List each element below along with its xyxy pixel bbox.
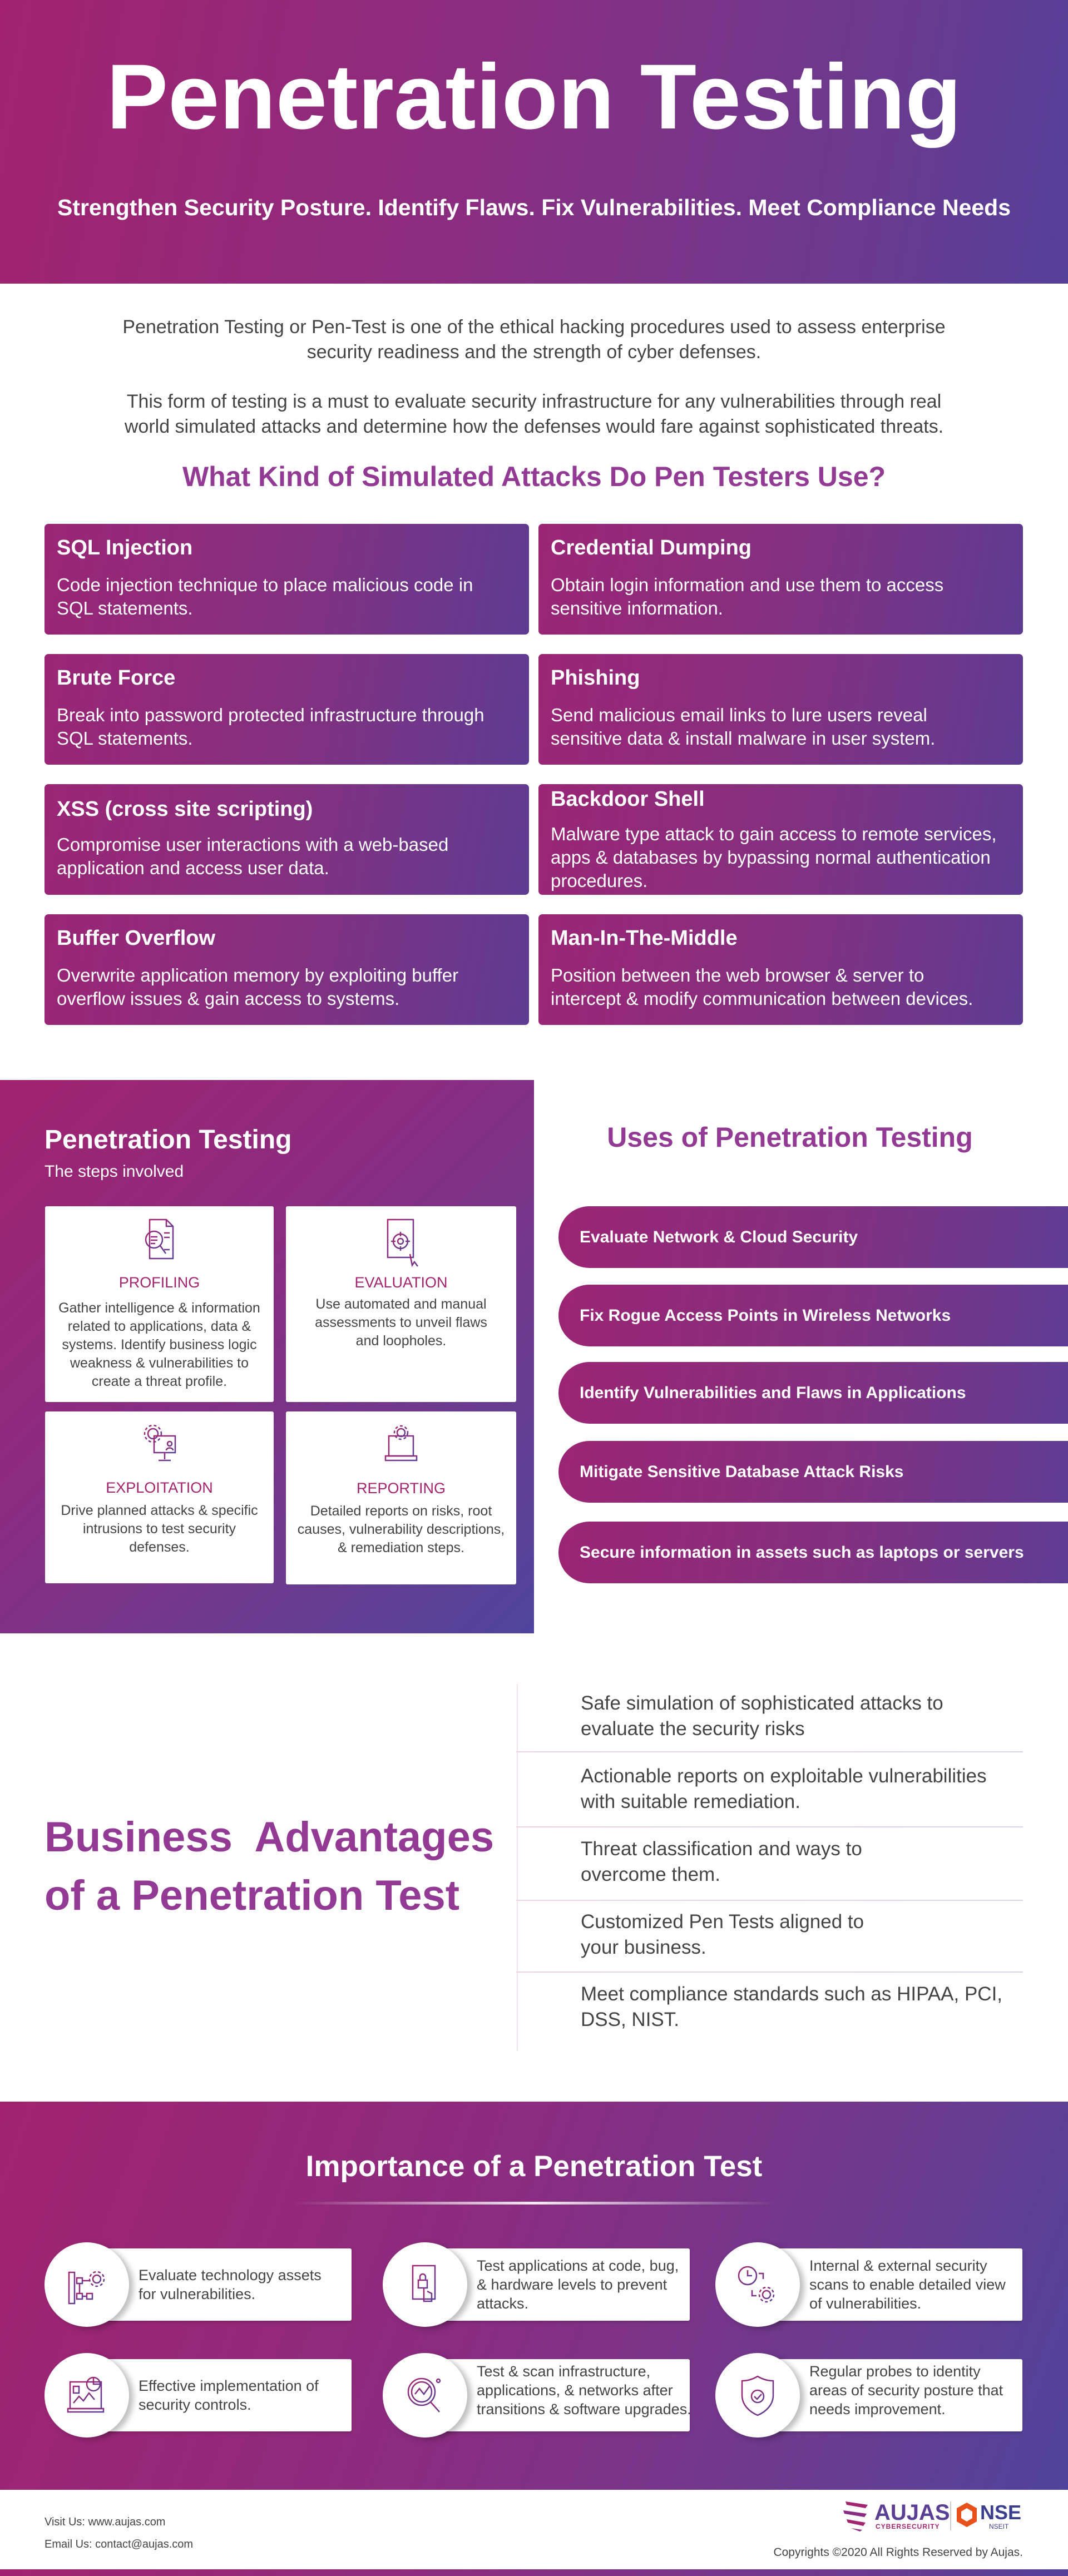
step: profiling: Gather intelligence & information: [58, 1300, 260, 1316]
intro paragraph 1: Penetration Testing or Pen-Test is one of the ethical hacking procedures used to assess enterprise: [122, 316, 946, 338]
title: Penetration Testing: [106, 46, 962, 148]
step: evaluation: Use automated and manual: [315, 1296, 487, 1312]
item: regular probes: [715, 2353, 1022, 2438]
footer contact: [44, 2511, 193, 2555]
logo: aujas nse: CYBERSECURITY: [876, 2523, 940, 2530]
card: Backdoor Shell: procedures.: [551, 870, 647, 891]
heading: simulated attacks: What Kind of Simulated Attacks Do Pen Testers Use?: [182, 461, 886, 492]
card: Brute Force: Break into password protected infrastructure through: [57, 705, 484, 725]
advantage 5: Meet compliance standards such as HIPAA, PCI,: [581, 1983, 1002, 2005]
advantage 2: with suitable remediation.: [581, 1791, 800, 1812]
item: security controls: security controls.: [139, 2396, 251, 2413]
step: evaluation: EVALUATION: [354, 1274, 448, 1291]
item: security controls: [44, 2353, 352, 2438]
step: profiling: systems. Identify business logic: [62, 1337, 257, 1353]
advantage 4: your business.: [581, 1936, 706, 1958]
item: test applications: & hardware levels to prevent: [477, 2276, 667, 2293]
card: Buffer Overflow: overflow issues & gain access to systems.: [57, 988, 399, 1009]
card: Buffer Overflow: Buffer Overflow: [57, 927, 215, 950]
item: evaluate assets: Evaluate technology assets: [139, 2267, 322, 2283]
card: XSS: [44, 784, 529, 895]
card: SQL Injection: Code injection technique to place malicious code in: [57, 574, 473, 595]
uses list: [558, 1206, 1068, 1583]
item: scan infrastructure: Test & scan infrastructure,: [477, 2363, 650, 2380]
step: evaluation: and loopholes.: [356, 1333, 446, 1349]
card: XSS: XSS (cross site scripting): [57, 797, 313, 821]
advantage 5: [581, 1983, 1002, 2030]
card: Buffer Overflow: [44, 914, 529, 1025]
intro paragraph 1: security readiness and the strength of cyber defenses.: [307, 341, 761, 363]
copyright: Copyrights ©2020 All Rights Reserved by Aujas.: [773, 2546, 1023, 2559]
step: profiling: weakness & vulnerabilities to: [70, 1355, 249, 1371]
advantage 3: overcome them.: [581, 1864, 720, 1885]
icon: document magnifier: [145, 1219, 174, 1259]
step: exploitation: Drive planned attacks & specific: [61, 1503, 258, 1518]
card: Man-In-The-Middle: Position between the web browser & server to: [551, 965, 924, 985]
icon: magnifier graph: [404, 2374, 446, 2416]
advantage 4: [581, 1911, 864, 1958]
step: reporting: Detailed reports on risks, root: [310, 1503, 492, 1519]
item: scan infrastructure: [383, 2353, 690, 2438]
icon: dashboard chart: [66, 2374, 108, 2416]
item: scan infrastructure: applications, & networks after: [477, 2382, 673, 2399]
card: Phishing: Phishing: [551, 666, 640, 690]
card: XSS: application and access user data.: [57, 858, 329, 878]
intro paragraph 1: [122, 316, 946, 363]
item: test applications: attacks.: [477, 2295, 528, 2312]
advantage 4: Customized Pen Tests aligned to: [581, 1911, 864, 1933]
panel: importance: [0, 2102, 1068, 2490]
icon: gear monitor: [144, 1425, 176, 1462]
intro paragraph 2: world simulated attacks and determine how the defenses would fare against sophisticated threats.: [125, 416, 943, 437]
advantage 3: Threat classification and ways to: [581, 1838, 862, 1860]
icon: shield check: [736, 2374, 779, 2416]
step: evaluation: [286, 1206, 516, 1402]
advantage 1: [581, 1692, 943, 1740]
step: reporting: causes, vulnerability descriptions,: [298, 1522, 505, 1537]
step: profiling: related to applications, data &: [68, 1319, 251, 1334]
logo: aujas nse: NSE: [980, 2501, 1021, 2524]
item: test applications: [383, 2242, 690, 2331]
pill: database: [558, 1441, 1068, 1503]
item: security scans: of vulnerabilities.: [809, 2295, 921, 2312]
icon: lock touch: [412, 2265, 436, 2302]
card: Man-In-The-Middle: Man-In-The-Middle: [551, 927, 738, 950]
logo: aujas nse: AUJAS: [874, 2500, 950, 2525]
steps subheading: The steps involved: [44, 1162, 184, 1181]
pill: assets: Secure information in assets such as laptops or servers: [580, 1543, 1024, 1562]
pill: vulnerabilities: [558, 1362, 1068, 1424]
card: Credential Dumping: sensitive information.: [551, 598, 723, 618]
item: security scans: scans to enable detailed view: [809, 2276, 1006, 2293]
panel: steps involved: [0, 1080, 534, 1633]
step: exploitation: defenses.: [129, 1539, 190, 1555]
step: profiling: PROFILING: [119, 1274, 200, 1291]
advantage 2: Actionable reports on exploitable vulnerabilities: [581, 1765, 987, 1787]
pill: network: [558, 1206, 1068, 1268]
card: Phishing: [538, 654, 1023, 765]
advantage 1: Safe simulation of sophisticated attacks to: [581, 1692, 943, 1714]
advantage 3: [581, 1838, 862, 1885]
importance heading: Importance of a Penetration Test: [306, 2150, 762, 2183]
header banner: [0, 0, 1068, 284]
advantage 2: [581, 1765, 987, 1812]
pill: rogue access: Fix Rogue Access Points in Wireless Networks: [580, 1306, 951, 1325]
logo: aujas nse: NSEIT: [989, 2523, 1008, 2530]
item: evaluate assets: for vulnerabilities.: [139, 2286, 255, 2302]
item: test applications: Test applications at code, bug,: [477, 2257, 679, 2274]
item: regular probes: areas of security posture that: [809, 2382, 1003, 2399]
pill: vulnerabilities: Identify Vulnerabilities and Flaws in Applications: [580, 1384, 966, 1402]
card: Brute Force: Brute Force: [57, 666, 175, 690]
icon: flow gear: [68, 2271, 105, 2305]
icon: laptop gear: [385, 1425, 417, 1462]
heading: business advantages: [44, 1814, 494, 1919]
card: Backdoor Shell: Malware type attack to gain access to remote services,: [551, 824, 997, 844]
item: security controls: Effective implementation of: [139, 2377, 319, 2394]
footer contact: Email Us: contact@aujas.com: [44, 2538, 193, 2550]
step: reporting: & remediation steps.: [338, 1540, 464, 1555]
card: Credential Dumping: [538, 524, 1023, 635]
step: profiling: [45, 1206, 274, 1402]
pill: assets: [558, 1522, 1068, 1583]
step: reporting: REPORTING: [357, 1480, 446, 1497]
heading: uses of penetration testing: Uses of Penetration Testing: [607, 1122, 973, 1153]
pill: rogue access: [558, 1285, 1068, 1346]
step: exploitation: intrusions to test security: [83, 1521, 236, 1537]
card: Backdoor Shell: apps & databases by bypassing normal authentication: [551, 847, 991, 868]
card: Brute Force: [44, 654, 529, 765]
card: Buffer Overflow: Overwrite application memory by exploiting buffer: [57, 965, 458, 985]
advantage 1: evaluate the security risks: [581, 1718, 805, 1740]
card: Brute Force: SQL statements.: [57, 728, 193, 749]
footer contact: Visit Us: www.aujas.com: [44, 2516, 165, 2528]
advantage 5: DSS, NIST.: [581, 2009, 679, 2030]
item: regular probes: Regular probes to identity: [809, 2363, 981, 2380]
heading: business advantages: Business Advantages: [44, 1814, 494, 1861]
card: SQL Injection: SQL Injection: [57, 536, 192, 559]
steps heading: Penetration Testing: [44, 1125, 291, 1155]
step: reporting: [286, 1411, 516, 1584]
item: evaluate assets: [44, 2242, 352, 2331]
card: Credential Dumping: Credential Dumping: [551, 536, 751, 559]
card: Credential Dumping: Obtain login information and use them to access: [551, 574, 943, 595]
step: evaluation: assessments to unveil flaws: [315, 1315, 487, 1330]
icon: target browser: [387, 1219, 418, 1267]
card: Backdoor Shell: Backdoor Shell: [551, 787, 705, 811]
item: security scans: [715, 2242, 1022, 2331]
pill: network: Evaluate Network & Cloud Security: [580, 1228, 858, 1246]
step: exploitation: [45, 1411, 274, 1583]
step: profiling: create a threat profile.: [92, 1374, 227, 1389]
card: Backdoor Shell: [538, 784, 1023, 895]
card: SQL Injection: SQL statements.: [57, 598, 193, 618]
subtitle: Strengthen Security Posture. Identify Flaws. Fix Vulnerabilities. Meet Compliance Needs: [57, 195, 1011, 220]
attack grid: [44, 524, 1023, 1025]
advantages list: [516, 1692, 1023, 2030]
card: SQL Injection: [44, 524, 529, 635]
card: Phishing: Send malicious email links to lure users reveal: [551, 705, 927, 725]
logo: aujas nse: [841, 2500, 1023, 2532]
heading: business advantages: of a Penetration Test: [44, 1872, 459, 1919]
pill: database: Mitigate Sensitive Database Attack Risks: [580, 1463, 903, 1481]
card: Man-In-The-Middle: intercept & modify communication between devices.: [551, 988, 973, 1009]
item: security scans: Internal & external security: [809, 2257, 987, 2274]
icon: clock gear: [736, 2263, 779, 2306]
card: Phishing: sensitive data & install malware in user system.: [551, 728, 935, 749]
item: regular probes: needs improvement.: [809, 2401, 946, 2418]
intro paragraph 2: [125, 391, 943, 437]
card: XSS: Compromise user interactions with a web-based: [57, 834, 448, 855]
card: Man-In-The-Middle: [538, 914, 1023, 1025]
item: scan infrastructure: transitions & software upgrades.: [477, 2401, 691, 2418]
step: exploitation: EXPLOITATION: [106, 1479, 213, 1496]
intro paragraph 2: This form of testing is a must to evaluate security infrastructure for any vulnerabilities through real: [127, 391, 941, 412]
